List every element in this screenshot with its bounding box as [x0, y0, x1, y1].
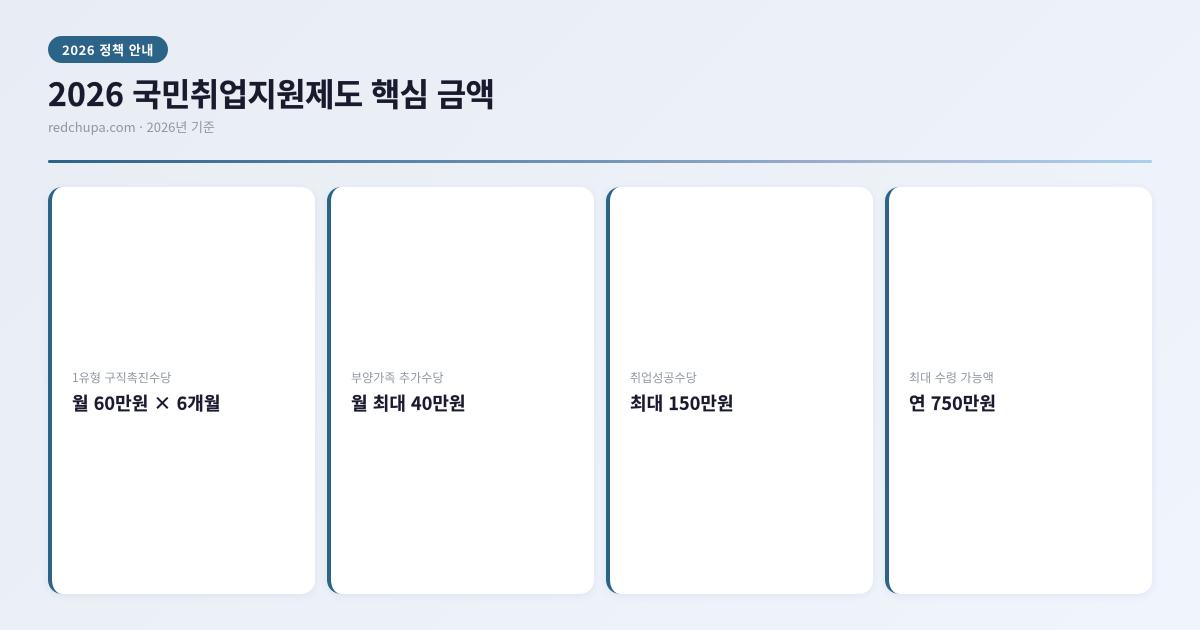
card value: 월 최대 40만원 — [351, 390, 466, 416]
card label: 최대 수령 가능액 — [909, 369, 994, 386]
header divider — [48, 160, 1152, 163]
badge: 2026 policy notice — [48, 36, 168, 63]
card label: 부양가족 추가수당 — [351, 369, 444, 386]
card value: 최대 150만원 — [630, 390, 734, 416]
card value: 연 750만원 — [909, 390, 996, 416]
panel: maximum receivable amount — [885, 187, 1152, 594]
panel: dependent family allowance — [327, 187, 594, 594]
panel: type 1 job-seeking allowance — [48, 187, 315, 594]
panel: employment success allowance — [606, 187, 873, 594]
card label: 취업성공수당 — [630, 369, 697, 386]
card value: 월 60만원 × 6개월 — [72, 390, 220, 416]
title: 2026 국민취업지원제도 핵심 금액 — [48, 70, 494, 116]
card label: 1유형 구직촉진수당 — [72, 369, 171, 386]
badge: 2026 policy notice: 2026 정책 안내 — [62, 40, 154, 59]
subtitle: source and base year: redchupa.com · 2026년 기준 — [48, 117, 215, 136]
